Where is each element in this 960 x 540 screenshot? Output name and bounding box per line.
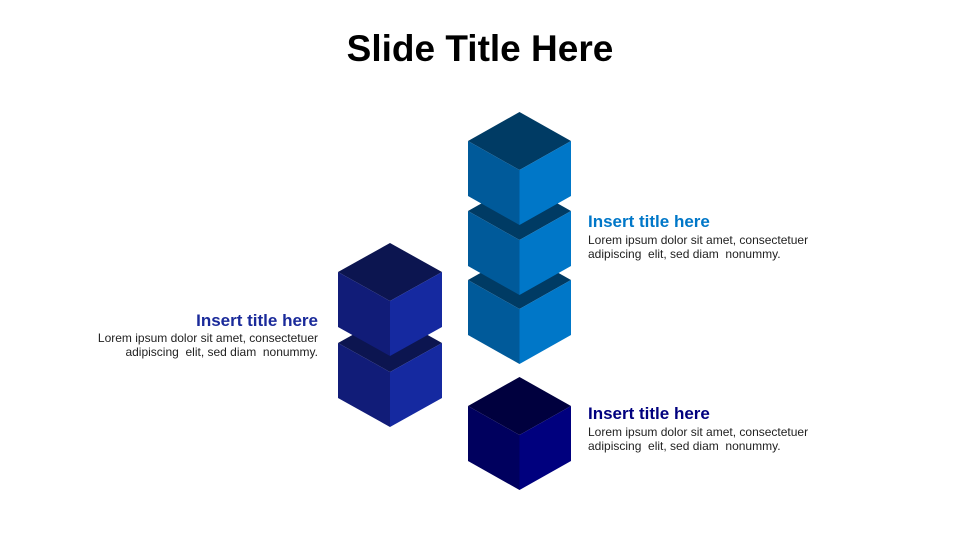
- body text: [588, 425, 808, 453]
- body text: [98, 331, 318, 359]
- title: Slide Title Here: [347, 28, 613, 69]
- text block: bottom right: [588, 404, 808, 453]
- cube column: royal blue stack: [338, 243, 442, 427]
- body text: Lorem ipsum dolor sit amet, consectetuer: [588, 233, 808, 247]
- body text: adipiscing elit, sed diam nonummy.: [588, 247, 781, 261]
- cube: navy single: [468, 377, 571, 490]
- heading: Insert title here: [196, 311, 318, 330]
- cube column: light blue stack: [468, 112, 571, 364]
- body text: adipiscing elit, sed diam nonummy.: [588, 439, 781, 453]
- text block: left: [98, 311, 318, 359]
- heading: Insert title here: [588, 404, 710, 423]
- heading: Insert title here: [588, 212, 710, 231]
- text block: top right: [588, 212, 808, 261]
- body text: adipiscing elit, sed diam nonummy.: [125, 345, 318, 359]
- body text: Lorem ipsum dolor sit amet, consectetuer: [588, 425, 808, 439]
- body text: [588, 233, 808, 261]
- body text: Lorem ipsum dolor sit amet, consectetuer: [98, 331, 318, 345]
